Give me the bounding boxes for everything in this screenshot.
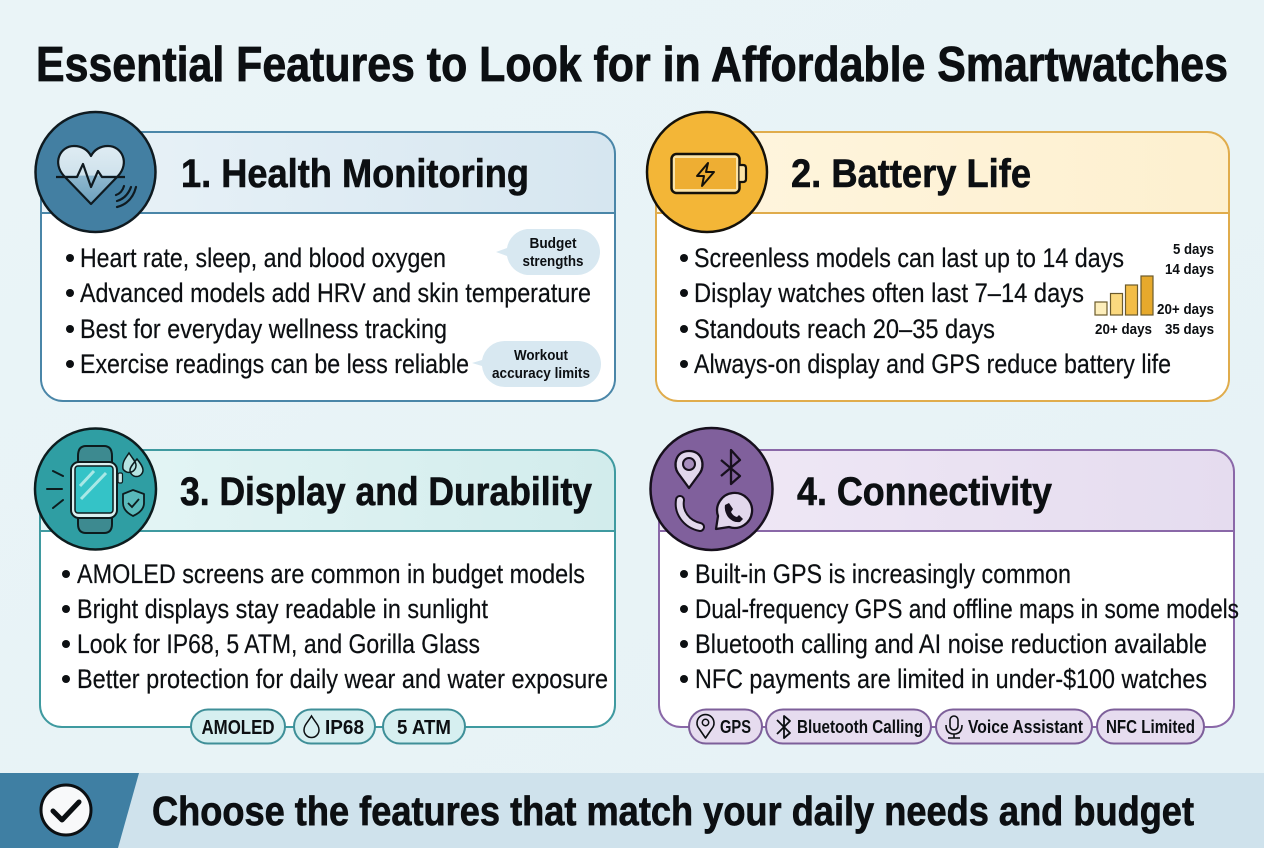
heading: 1. Health Monitoring [181,152,529,196]
bullet list: Display watches often last 7–14 days [694,278,1084,308]
bar chart: battery days: 5 days [1173,241,1214,258]
bullet list: Built-in GPS is increasingly common [695,559,1071,589]
heading: 3. Display and Durability [180,470,593,514]
tag: Bluetooth Calling: Bluetooth Calling [797,717,923,737]
bullet list: Heart rate, sleep, and blood oxygen [80,243,446,273]
bar chart: battery days: 14 days [1165,261,1214,278]
tag: GPS: GPS [720,717,751,737]
tag: Voice Assistant [936,710,1092,744]
tag: NFC Limited [1097,710,1204,744]
icon: smartwatch [35,428,156,550]
bar chart: battery days [1095,241,1214,338]
bullet list: Better protection for daily wear and water exposure [77,664,608,694]
tag: GPS [689,710,762,744]
bullet list: Advanced models add HRV and skin temperature [80,278,591,308]
bullet list [680,559,1239,694]
bar chart: battery days: 20+ days [1095,321,1152,338]
bullet list: Exercise readings can be less reliable [80,349,469,379]
bar chart: battery days: 35 days [1165,321,1214,338]
bullet list [62,559,608,694]
bullet list: Best for everyday wellness tracking [80,314,447,344]
callout: budget strengths: strengths [522,253,584,270]
tag: IP68 [294,710,375,744]
tag: AMOLED [191,710,285,744]
tag: Bluetooth Calling [766,710,931,744]
panel: display and durability [35,428,615,744]
tag: AMOLED: AMOLED [202,717,274,739]
callout: workout accuracy limits: Workout [514,347,568,364]
tag: IP68: IP68 [325,717,364,739]
footer banner [0,773,1264,848]
tag: 5 ATM: 5 ATM [397,717,451,739]
heading: 4. Connectivity [797,470,1053,514]
panel: health monitoring [36,112,615,401]
callout: workout accuracy limits: accuracy limits [492,365,590,382]
bullet list: Bright displays stay readable in sunlight [77,594,488,624]
bullet list [680,243,1171,379]
bar chart: battery days: 20+ days [1157,301,1214,318]
bullet list: Screenless models can last up to 14 days [694,243,1124,273]
heading: 2. Battery Life [791,152,1031,196]
icon: battery [647,112,767,232]
tag: Voice Assistant: Voice Assistant [968,717,1083,737]
bullet list: Look for IP68, 5 ATM, and Gorilla Glass [77,629,480,659]
bullet list: Standouts reach 20–35 days [694,314,995,344]
tag: NFC Limited: NFC Limited [1106,717,1195,737]
panel: battery life [647,112,1229,401]
icon: check mark [41,785,91,835]
callout: budget strengths: Budget [530,235,576,252]
panel: connectivity [650,428,1239,744]
bullet list: AMOLED screens are common in budget models [77,559,585,589]
bullet list: Always-on display and GPS reduce battery life [694,349,1171,379]
tag: 5 ATM [383,710,465,744]
callout: workout accuracy limits [472,341,601,387]
callout: budget strengths [496,229,600,275]
icon: connectivity symbols [650,428,772,550]
bullet list [66,243,591,379]
icon: heart rate [36,112,156,232]
